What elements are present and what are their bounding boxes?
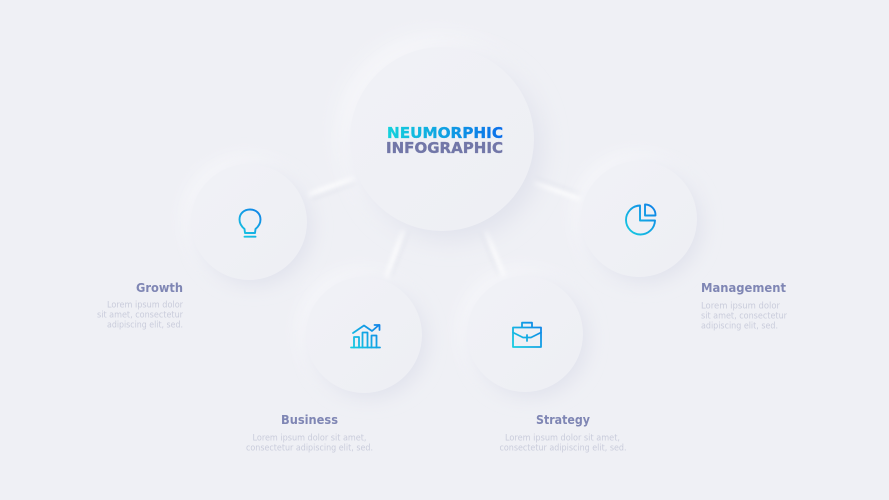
- main circle: [342, 39, 542, 239]
- title: INFOGRAPHIC: [386, 139, 503, 157]
- circle: management: [576, 156, 702, 282]
- text block: growth: Lorem ipsum dolor: [107, 300, 184, 310]
- connector: main to business: [386, 230, 409, 279]
- connector: main to growth: [308, 178, 356, 199]
- text block: growth: Growth: [136, 281, 183, 295]
- circle: strategy: [462, 271, 588, 397]
- title: NEUMORPHIC: [387, 124, 503, 142]
- connector: main to management: [534, 178, 581, 199]
- text block: management: adipiscing elit, sed.: [701, 320, 778, 330]
- text block: growth: [97, 281, 184, 330]
- text block: management: Lorem ipsum dolor: [701, 300, 781, 310]
- icon: bar chart with arrow: [351, 325, 380, 348]
- circle: business: [301, 272, 427, 398]
- connector: main to strategy: [481, 231, 504, 277]
- title: [386, 124, 503, 157]
- icon: briefcase: [513, 323, 541, 347]
- text block: growth: adipiscing elit, sed.: [107, 320, 183, 330]
- icon: pie chart: [626, 204, 656, 234]
- text block: strategy: [500, 413, 626, 452]
- text block: business: Business: [281, 413, 338, 427]
- text block: management: Management: [701, 281, 786, 295]
- text block: management: [701, 281, 788, 330]
- text block: strategy: consectetur adipiscing elit, sed.: [500, 442, 626, 452]
- text block: business: [246, 413, 373, 452]
- text block: business: Lorem ipsum dolor sit amet,: [252, 432, 366, 442]
- text block: management: sit amet, consectetur: [701, 310, 788, 320]
- text block: strategy: Lorem ipsum dolor sit amet,: [505, 432, 620, 442]
- text block: strategy: Strategy: [536, 413, 590, 427]
- icon: light bulb: [240, 210, 260, 237]
- text block: business: consectetur adipiscing elit, sed.: [246, 442, 373, 452]
- text block: growth: sit amet, consectetur: [97, 310, 184, 320]
- circle: growth: [186, 159, 312, 285]
